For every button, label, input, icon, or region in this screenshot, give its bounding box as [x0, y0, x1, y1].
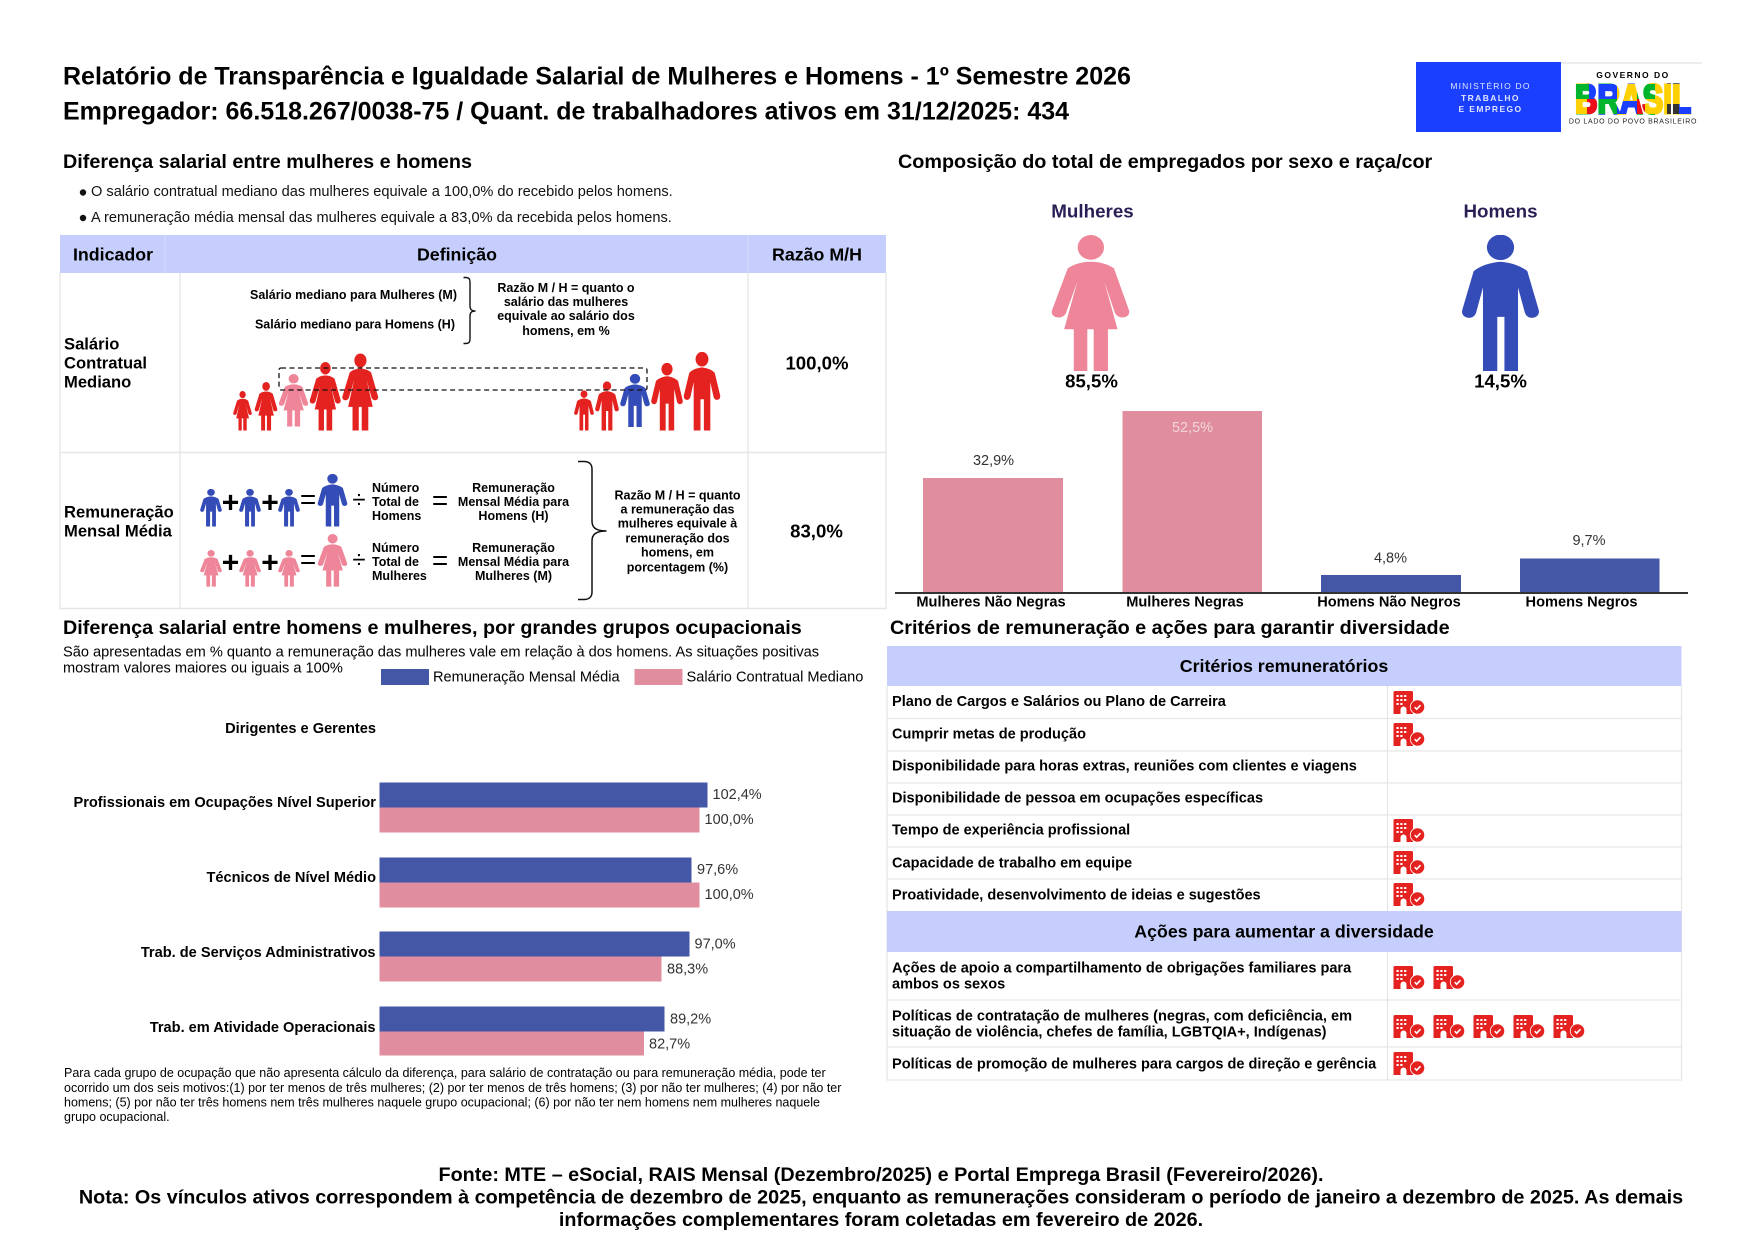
definition: remuneração média mulheres: + [222, 546, 239, 580]
definition: remuneração média homens: = [300, 484, 316, 514]
bar chart: grupos ocupacionais: 88,3% [667, 962, 708, 978]
icons: homens ordenados [574, 352, 720, 430]
definition: remuneração média homens: + [222, 486, 239, 520]
table: ações para diversidade: situação de violência, chefes de família, LGBTQIA+, Indígenas) [892, 1024, 1327, 1040]
text block: resumo: A remuneração média mensal das mulheres equivale a 83,0% da recebida pelos homens. [91, 210, 672, 226]
value: 83,0%: 83,0% [790, 520, 843, 542]
pictogram: mulheres 85,5%: Mulheres [1051, 200, 1134, 222]
row label: salário contratual mediano: Contratual [64, 354, 147, 372]
table: critérios remuneratórios: Tempo de experiência profissional [892, 822, 1130, 838]
definition: remuneração média mulheres [200, 534, 570, 587]
logo: ministério e governo: TRABALHO [1461, 93, 1520, 103]
definition: remuneração média mulheres: = [432, 544, 448, 576]
brace and ratio text: a remuneração das [621, 502, 735, 516]
icons: mulheres ordenadas [233, 354, 378, 430]
definition: salário mediano: salário das mulheres [504, 295, 628, 309]
logo: ministério e governo: DO LADO DO POVO BRASILEIRO [1569, 118, 1697, 126]
heading: diferença salarial: Diferença salarial entre mulheres e homens [63, 151, 472, 173]
table: ações para diversidade: Ações para aumentar a diversidade [1134, 922, 1434, 942]
text block: resumo [80, 184, 673, 226]
row label: salário contratual mediano: Salário [64, 334, 119, 354]
bar chart: sexo e raça/cor: 32,9% [973, 453, 1014, 469]
panel: diferença salarial [60, 151, 886, 608]
bar chart: sexo e raça/cor: Homens Negros [1526, 594, 1637, 610]
definition: remuneração média homens: = [432, 484, 448, 516]
definition: remuneração média mulheres: Mensal Média para [458, 555, 570, 569]
bar chart: sexo e raça/cor [895, 411, 1688, 610]
definition: remuneração média mulheres: = [300, 544, 316, 574]
definition: remuneração média homens: Homens [372, 509, 421, 523]
definition: remuneração média homens: + [261, 486, 279, 520]
bar chart: grupos ocupacionais: 82,7% [649, 1036, 690, 1052]
table header: Razão M/H [772, 244, 862, 264]
definition: remuneração média homens [200, 474, 570, 526]
bar chart: grupos ocupacionais: 89,2% [670, 1012, 711, 1028]
logo: ministério e governo: BRASIL [1575, 76, 1691, 122]
definition: remuneração média mulheres: + [261, 546, 279, 580]
table: critérios remuneratórios [887, 646, 1682, 1080]
text block: nota de rodapé: homens; (5) por não ter três homens nem três mulheres naquele grupo ocupacional; (6) por não ter nem homens nem mulheres naquele [64, 1096, 820, 1110]
table: ações para diversidade [887, 911, 1682, 1076]
bar chart: sexo e raça/cor: Mulheres Negras [1126, 594, 1244, 610]
definition: remuneração média homens: Homens (H) [478, 509, 549, 523]
logo: ministério e governo: E EMPREGO [1458, 104, 1523, 114]
definition: remuneração média homens: Mensal Média para [458, 495, 570, 509]
bar chart: sexo e raça/cor: Mulheres Não Negras [916, 594, 1066, 610]
logo: ministério e governo [1416, 62, 1702, 132]
table: critérios remuneratórios: Disponibilidade de pessoa em ocupações específicas [892, 790, 1263, 806]
definition: salário mediano: equivale ao salário dos [497, 309, 635, 323]
row label: remuneração mensal média: Mensal Média [64, 522, 173, 540]
table: ações para diversidade: ambos os sexos [892, 976, 1005, 992]
brace and ratio text: homens, em [641, 546, 714, 560]
table: ações para diversidade: Políticas de contratação de mulheres (negras, com deficiência, em [892, 1008, 1352, 1024]
definition: salário mediano: Salário mediano para Mulheres (M) [250, 288, 457, 302]
panel: composição [895, 151, 1688, 610]
panel: grupos ocupacionais [63, 617, 863, 1124]
text block: nota de rodapé: ocorrido um dos seis motivos:(1) por ter menos de três mulheres; (2) por ter menos de três homens; (3) por não ter mulheres; (4) por não ter [64, 1081, 841, 1095]
definition: remuneração média mulheres: ÷ [352, 546, 366, 574]
definition: remuneração média homens: Número [372, 481, 420, 495]
table: indicadores [60, 235, 886, 608]
pictogram: homens 14,5% [1462, 200, 1539, 392]
row label: salário contratual mediano [64, 334, 147, 392]
table header: Indicador [73, 244, 153, 264]
bar chart: grupos ocupacionais [73, 721, 762, 1056]
definition: salário mediano [250, 278, 635, 344]
definition: salário mediano: homens, em % [522, 324, 610, 338]
dashed box: medianas [279, 368, 647, 390]
title: Empregador: 66.518.267/0038-75 / Quant. de trabalhadores ativos em 31/12/2025: 434 [63, 98, 1069, 126]
table: critérios remuneratórios: Disponibilidade para horas extras, reuniões com clientes e viagens [892, 758, 1357, 774]
bar chart: sexo e raça/cor: 9,7% [1572, 533, 1606, 549]
text block: nota de rodapé: grupo ocupacional. [64, 1110, 170, 1124]
definition: remuneração média mulheres: Mulheres (M) [475, 569, 552, 583]
bar chart: grupos ocupacionais: Dirigentes e Gerentes [225, 721, 376, 737]
text block: nota de rodapé: Para cada grupo de ocupação que não apresenta cálculo da diferença, para salário de contratação ou para remuneração média, pode ter [64, 1066, 826, 1080]
pictogram: homens 14,5%: 14,5% [1474, 370, 1527, 392]
definition: remuneração média mulheres: Mulheres [372, 569, 427, 583]
heading: critérios: Critérios de remuneração e ações para garantir diversidade [890, 617, 1450, 639]
title [63, 62, 1131, 126]
bar chart: grupos ocupacionais: Trab. em Atividade Operacionais [150, 1020, 376, 1036]
logo: ministério e governo: GOVERNO DO [1596, 70, 1670, 80]
bar chart: grupos ocupacionais: 102,4% [712, 787, 762, 803]
bar chart: sexo e raça/cor: Homens Não Negros [1317, 594, 1461, 610]
text block: explicação: São apresentadas em % quanto a remuneração das mulheres vale em relação à dos homens. As situações positivas [63, 644, 819, 660]
table: critérios remuneratórios: Critérios remuneratórios [1180, 656, 1388, 676]
footer: fonte e nota [79, 1164, 1683, 1231]
table header: Definição [417, 244, 497, 264]
pictogram: mulheres 85,5%: 85,5% [1065, 370, 1118, 392]
pictogram: homens 14,5%: Homens [1463, 200, 1538, 222]
table: critérios remuneratórios: Cumprir metas de produção [892, 726, 1086, 742]
text block: resumo: O salário contratual mediano das mulheres equivale a 100,0% do recebido pelos homens. [91, 184, 673, 200]
bar chart: grupos ocupacionais: Técnicos de Nível Médio [206, 870, 376, 886]
row label: remuneração mensal média: Remuneração [64, 502, 174, 522]
footer: fonte e nota: Fonte: MTE – eSocial, RAIS Mensal (Dezembro/2025) e Portal Emprega Brasil (Fevereiro/2026). [439, 1164, 1323, 1186]
table: critérios remuneratórios: Proatividade, desenvolvimento de ideias e sugestões [892, 888, 1261, 904]
panel: critérios e ações [887, 617, 1682, 1080]
definition: salário mediano: Salário mediano para Homens (H) [255, 318, 455, 332]
row label: salário contratual mediano: Mediano [64, 372, 131, 392]
legend [381, 669, 863, 686]
pictogram: mulheres 85,5% [1051, 200, 1134, 392]
footer: fonte e nota: Nota: Os vínculos ativos correspondem à competência de dezembro de 2025, enquanto as remunerações consideram o período de janeiro a dezembro de 2025. As demais [79, 1186, 1683, 1208]
definition: remuneração média mulheres: Total de [372, 555, 419, 569]
definition: remuneração média mulheres: Remuneração [472, 541, 555, 555]
title: Relatório de Transparência e Igualdade Salarial de Mulheres e Homens - 1º Semestre 2026 [63, 62, 1131, 90]
definition: remuneração média homens: ÷ [352, 486, 366, 514]
text block: nota de rodapé [64, 1066, 841, 1124]
table: ações para diversidade: Políticas de promoção de mulheres para cargos de direção e gerência [892, 1056, 1377, 1072]
bar chart: grupos ocupacionais: 97,0% [694, 936, 736, 952]
table: ações para diversidade: Ações de apoio a compartilhamento de obrigações familiares para [892, 960, 1352, 976]
definition: remuneração média homens: Total de [372, 495, 419, 509]
definition: salário mediano: Razão M / H = quanto o [497, 281, 635, 295]
brace and ratio text: remuneração dos [625, 532, 730, 546]
bar chart: sexo e raça/cor: 52,5% [1172, 420, 1213, 436]
brace and ratio text: porcentagem (%) [627, 560, 728, 574]
bar chart: grupos ocupacionais: Trab. de Serviços Administrativos [141, 945, 376, 961]
heading: composição: Composição do total de empregados por sexo e raça/cor [898, 151, 1433, 173]
footer: fonte e nota: informações complementares foram coletadas em fevereiro de 2026. [559, 1209, 1203, 1231]
logo: ministério e governo: MINISTÉRIO DO [1450, 81, 1531, 91]
bar chart: sexo e raça/cor: 4,8% [1374, 550, 1407, 566]
brace and ratio text: mulheres equivale à [618, 516, 737, 530]
value: 100,0%: 100,0% [785, 352, 849, 374]
text block: explicação: mostram valores maiores ou iguais a 100% [63, 660, 343, 676]
definition: remuneração média homens: Remuneração [472, 481, 555, 495]
bar chart: grupos ocupacionais: 100,0% [704, 812, 754, 828]
table: critérios remuneratórios: Capacidade de trabalho em equipe [892, 856, 1132, 872]
brace and ratio text: Razão M / H = quanto [614, 488, 741, 502]
legend: Salário Contratual Mediano [686, 670, 863, 686]
bar chart: grupos ocupacionais: 97,6% [697, 862, 738, 878]
row label: remuneração mensal média [64, 502, 174, 540]
table: critérios remuneratórios: Plano de Cargos e Salários ou Plano de Carreira [892, 694, 1227, 710]
brace and ratio text [578, 462, 741, 600]
definition: remuneração média mulheres: Número [372, 541, 420, 555]
text block: explicação [63, 644, 819, 676]
legend: Remuneração Mensal Média [433, 670, 620, 686]
table header [73, 244, 862, 264]
heading: grandes grupos: Diferença salarial entre homens e mulheres, por grandes grupos ocupacionais [63, 617, 802, 639]
bar chart: grupos ocupacionais: Profissionais em Ocupações Nível Superior [73, 795, 376, 811]
bar chart: grupos ocupacionais: 100,0% [704, 887, 754, 903]
